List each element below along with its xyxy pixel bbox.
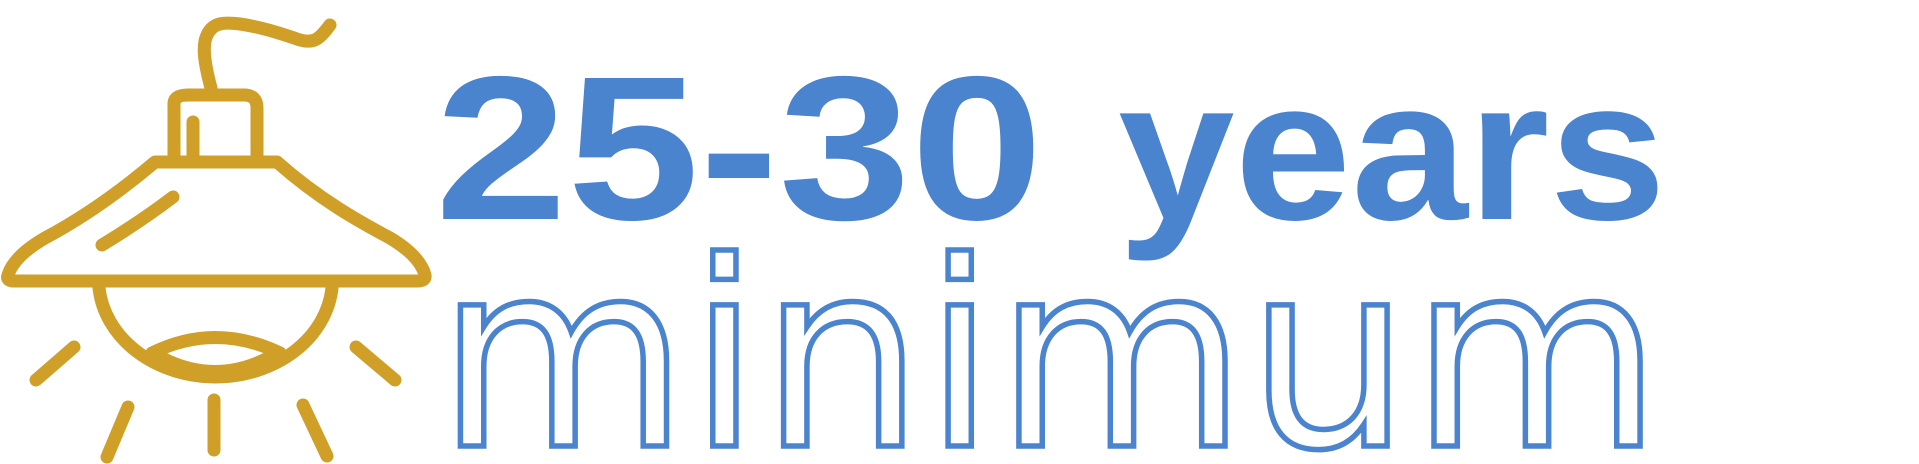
icon: pendant lamp bbox=[8, 23, 425, 457]
heading: 25-30: 25-30 bbox=[435, 34, 1043, 263]
heading: years: years bbox=[1118, 39, 1666, 262]
